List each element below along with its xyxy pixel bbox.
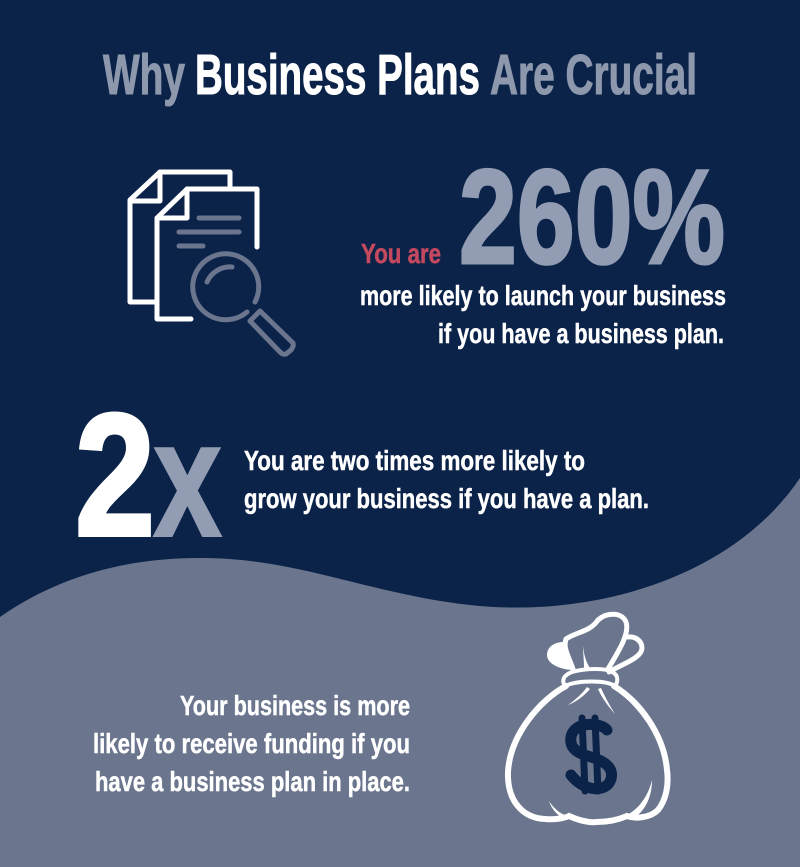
- stat: 2x: 2: [75, 377, 155, 572]
- dollar sign: [571, 718, 612, 791]
- stat: 260 percent: 260%: [459, 143, 725, 292]
- text: growth statistic: You are two times more likely to: [244, 445, 585, 476]
- icon: money bag: [508, 614, 668, 822]
- title: Business Plans: [195, 43, 480, 107]
- stat: 2x: x: [153, 387, 222, 572]
- title: Why: [103, 43, 185, 107]
- icon: documents with magnifying glass: [130, 172, 293, 354]
- text: funding statistic: likely to receive funding if you: [93, 728, 410, 759]
- stat: 2x: [75, 377, 222, 572]
- text: funding statistic: [93, 690, 410, 797]
- title: Are Crucial: [490, 43, 697, 107]
- text: growth statistic: grow your business if you have a plan.: [244, 483, 649, 514]
- knot band: [563, 669, 617, 686]
- bag body: [508, 686, 668, 822]
- text: you are: You are: [361, 238, 441, 269]
- bag creases: [549, 687, 652, 820]
- bag top folds: [565, 614, 627, 669]
- text: launch statistic: if you have a business plan.: [438, 318, 724, 349]
- text: funding statistic: have a business plan in place.: [95, 766, 410, 797]
- panel: grey wave section: [0, 478, 800, 867]
- text: funding statistic: Your business is more: [180, 690, 410, 721]
- text: growth statistic: [244, 445, 649, 514]
- text: launch statistic: [360, 280, 726, 349]
